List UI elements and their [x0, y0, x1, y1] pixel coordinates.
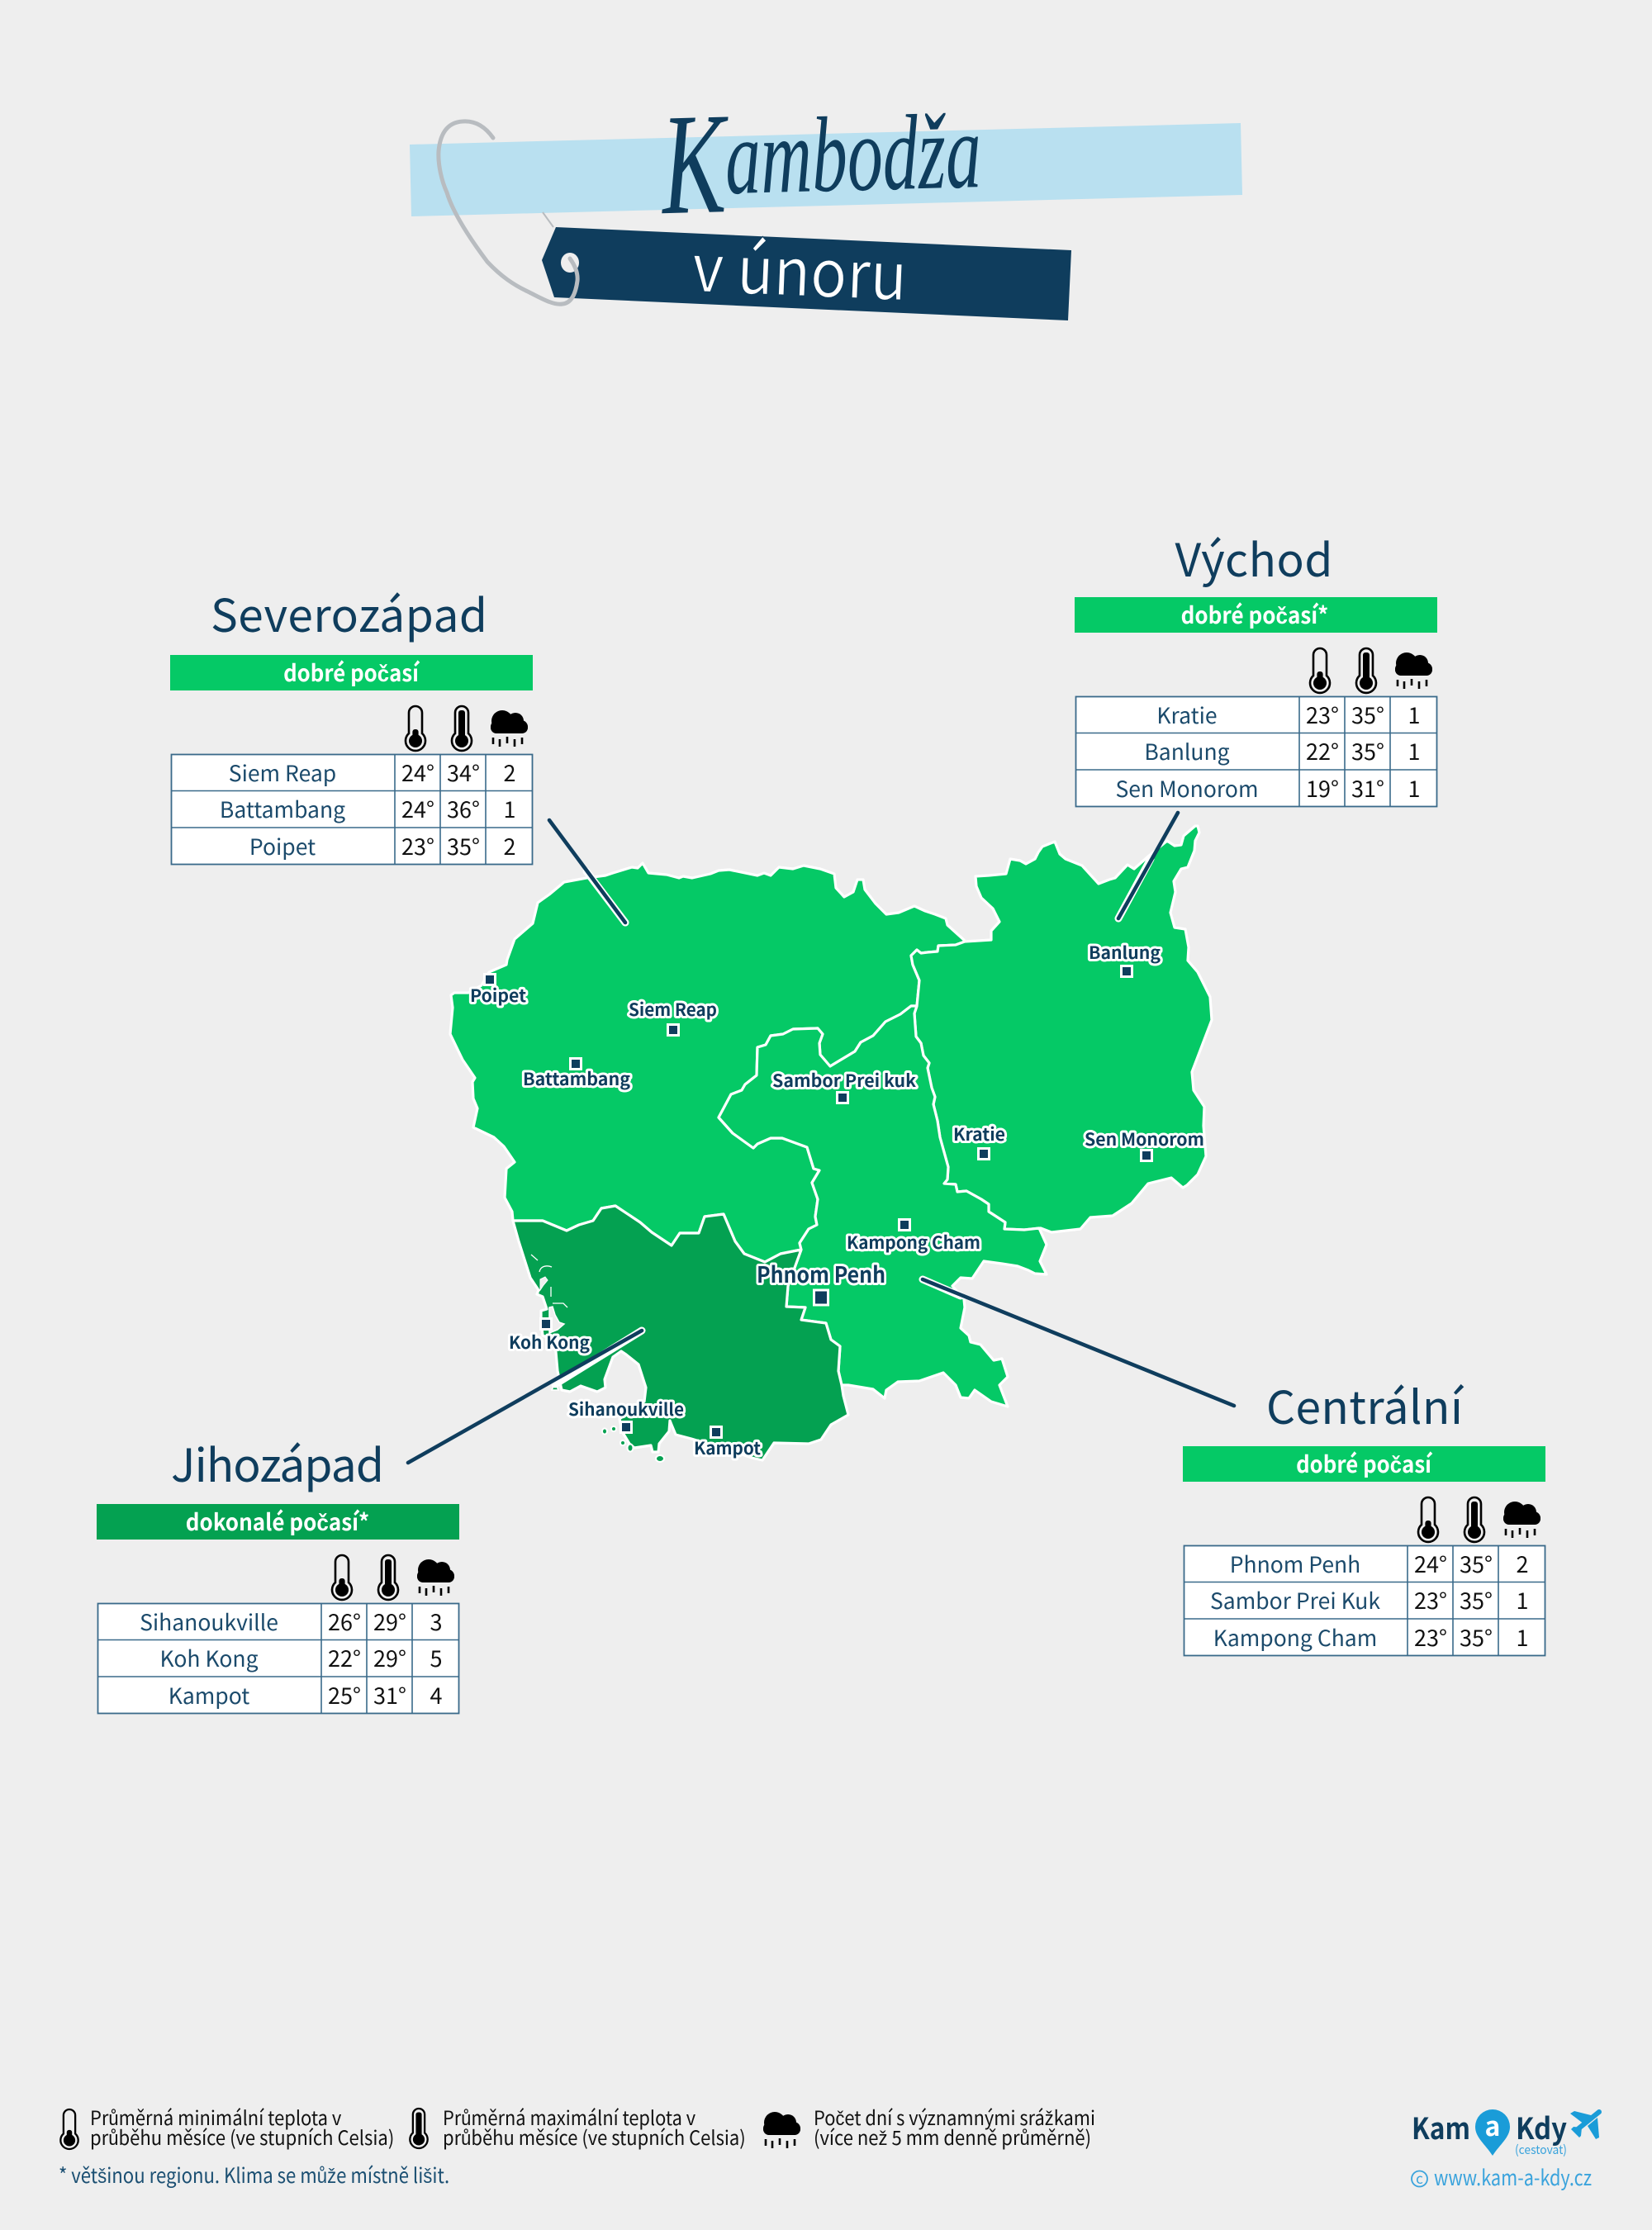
logo: Kam a Kdy: (cestovat): [1515, 2141, 1567, 2158]
panel: Jihozápad: [97, 1429, 459, 1714]
region: Centrální: [719, 1006, 1047, 1407]
panel: Centrální: [1183, 1371, 1545, 1656]
panel: Východ: 22°: [1306, 734, 1339, 766]
panel: Severozápad: 23°: [401, 829, 434, 861]
legend: min temperature: [60, 2109, 78, 2149]
panel: Centrální: 23°: [1414, 1620, 1447, 1653]
panel: Centrální: Phnom Penh: [1230, 1547, 1360, 1579]
panel: Severozápad: Poipet: [249, 829, 316, 861]
logo: Kam a Kdy: Kam: [1412, 2105, 1470, 2148]
panel: Jihozápad: Sihanoukville: [140, 1605, 278, 1637]
panel: Východ: 1: [1408, 698, 1421, 730]
panel: Jihozápad: 31°: [373, 1678, 406, 1710]
panel: Východ: 31°: [1351, 771, 1384, 804]
icon: location pin: [1475, 2109, 1510, 2156]
panel: Východ: 19°: [1306, 771, 1339, 804]
panel: Jihozápad: Koh Kong: [159, 1641, 259, 1673]
region: Východ: [911, 826, 1212, 1232]
legend: rainy days: [763, 2112, 800, 2148]
panel: Severozápad: 34°: [447, 756, 480, 788]
heading: Jihozápad: [171, 1429, 384, 1495]
panel: Centrální: 35°: [1460, 1583, 1493, 1616]
city labels: Kratie: [953, 1122, 1005, 1146]
website: www.kam-a-kdy.cz: [1434, 2161, 1592, 2192]
table: [1184, 1546, 1545, 1655]
leader line: Severozápad: [549, 820, 625, 923]
panel: Centrální: 1: [1517, 1583, 1528, 1616]
logo: Kam a Kdy: [1412, 2105, 1599, 2192]
panel: Východ: [1075, 524, 1437, 807]
city markers: [484, 966, 1151, 1437]
title: Kambodža: ambodža: [724, 91, 983, 216]
city labels: Sen Monorom: [1085, 1127, 1204, 1151]
light blue title band: [410, 123, 1242, 216]
panel: Severozápad: 1: [504, 792, 515, 824]
panel: Východ: Kratie: [1156, 698, 1218, 730]
legend: (více než 5 mm denně průměrně): [814, 2122, 1091, 2151]
table: [1075, 697, 1437, 806]
panel: Severozápad: 35°: [447, 829, 480, 861]
legend: průběhu měsíce (ve stupních Celsia): [443, 2122, 746, 2151]
heading: Východ: [1175, 524, 1333, 590]
panel: Jihozápad: 3: [430, 1605, 443, 1637]
dark subtitle tag: [542, 227, 1071, 320]
legend: Průměrná minimální teplota v: [90, 2102, 341, 2131]
grey string loop: [439, 121, 577, 304]
panel: Centrální: Sambor Prei Kuk: [1210, 1583, 1380, 1616]
legend: průběhu měsíce (ve stupních Celsia): [90, 2122, 394, 2151]
panel: Centrální: dobré počasí: [1296, 1446, 1433, 1479]
logo: Kam a Kdy: Kdy: [1516, 2105, 1567, 2148]
panel: Centrální: 35°: [1460, 1620, 1493, 1653]
table: [172, 755, 532, 864]
region: Jihozápad: [513, 1206, 848, 1460]
city labels: Banlung: [1089, 940, 1161, 965]
city labels: [470, 940, 1204, 1460]
panel: Východ: 35°: [1351, 734, 1384, 766]
weather bar: [97, 1504, 459, 1540]
city labels: Kampong Cham: [847, 1230, 980, 1255]
icons: [406, 706, 425, 751]
panel: Jihozápad: 5: [430, 1641, 443, 1673]
city labels: Kampot: [694, 1435, 761, 1460]
panel: Centrální: 35°: [1460, 1547, 1493, 1579]
weather bar: [1075, 597, 1437, 633]
icons: [1310, 648, 1330, 693]
leader line: Centrální: [923, 1279, 1234, 1406]
panel: Jihozápad: 4: [430, 1678, 443, 1710]
city labels: Phnom Penh: [757, 1257, 885, 1289]
panel: Východ: dobré počasí*: [1181, 597, 1328, 630]
weather bar: [1183, 1446, 1545, 1482]
icons: [332, 1555, 352, 1600]
city labels: Koh Kong: [509, 1330, 590, 1355]
panel: Severozápad: [170, 579, 533, 865]
icon: copyright: [1412, 2167, 1427, 2188]
title: Kambodža: K: [658, 83, 732, 245]
panel: Centrální: Kampong Cham: [1213, 1620, 1377, 1653]
table: [97, 1604, 459, 1713]
region: Severozápad: [450, 863, 965, 1262]
panel: Severozápad: 24°: [401, 756, 434, 788]
panel: Severozápad: 36°: [447, 792, 480, 824]
city labels: Siem Reap: [629, 997, 717, 1022]
legend: [60, 2102, 1095, 2151]
panel: Jihozápad: dokonalé počasí*: [186, 1504, 369, 1537]
panel: Centrální: 1: [1517, 1620, 1528, 1653]
legend: max temperature: [410, 2109, 428, 2148]
islands and coast details: [531, 1255, 664, 1462]
panel: Severozápad: Battambang: [220, 792, 345, 824]
leader line: Jihozápad: [408, 1331, 642, 1463]
leader line: Východ: [1118, 813, 1178, 918]
city labels: Sihanoukville: [568, 1397, 684, 1421]
logo: Kam a Kdy: a: [1485, 2106, 1500, 2144]
header: title band and tag: [410, 77, 1242, 320]
tag hole: [561, 253, 579, 273]
subtitle: v únoru: v únoru: [691, 216, 909, 320]
panel: Jihozápad: 29°: [373, 1641, 406, 1673]
heading: Severozápad: [211, 579, 487, 645]
map of Cambodia: [450, 826, 1212, 1462]
panel: Východ: 23°: [1306, 698, 1339, 730]
panel: Severozápad: 24°: [401, 792, 434, 824]
heading: Centrální: [1266, 1371, 1464, 1437]
legend: Průměrná maximální teplota v: [443, 2102, 695, 2131]
footnote: * většinou regionu. Klima se může místně lišit.: [59, 2159, 449, 2189]
panel: Jihozápad: Kampot: [169, 1678, 249, 1710]
panel: Jihozápad: 26°: [328, 1605, 361, 1637]
panel: Východ: 1: [1408, 734, 1421, 766]
panel: Jihozápad: 25°: [328, 1678, 361, 1710]
panel: Jihozápad: 22°: [328, 1641, 361, 1673]
city labels: Battambang: [523, 1066, 630, 1091]
panel: Severozápad: dobré počasí: [283, 655, 420, 688]
panel: Východ: 1: [1408, 771, 1421, 804]
panel: Severozápad: 2: [504, 756, 515, 788]
icons: [1418, 1497, 1438, 1542]
weather bar: [170, 655, 533, 690]
icon: plane: [1570, 2111, 1599, 2139]
panel: Severozápad: 2: [504, 829, 515, 861]
icon: copyright: c: [1416, 2167, 1423, 2188]
panel: Centrální: 24°: [1414, 1547, 1447, 1579]
thin string segment: [543, 212, 553, 227]
panel: Východ: Sen Monorom: [1116, 771, 1258, 804]
panel: Východ: Banlung: [1144, 734, 1230, 766]
city labels: Sambor Prei kuk: [772, 1068, 916, 1093]
panel: Centrální: 2: [1517, 1547, 1528, 1579]
city labels: Poipet: [470, 983, 526, 1008]
legend: Počet dní s významnými srážkami: [814, 2102, 1095, 2131]
panel: Jihozápad: 29°: [373, 1605, 406, 1637]
panel: Severozápad: Siem Reap: [229, 756, 336, 788]
panel: Východ: 35°: [1351, 698, 1384, 730]
panel: Centrální: 23°: [1414, 1583, 1447, 1616]
